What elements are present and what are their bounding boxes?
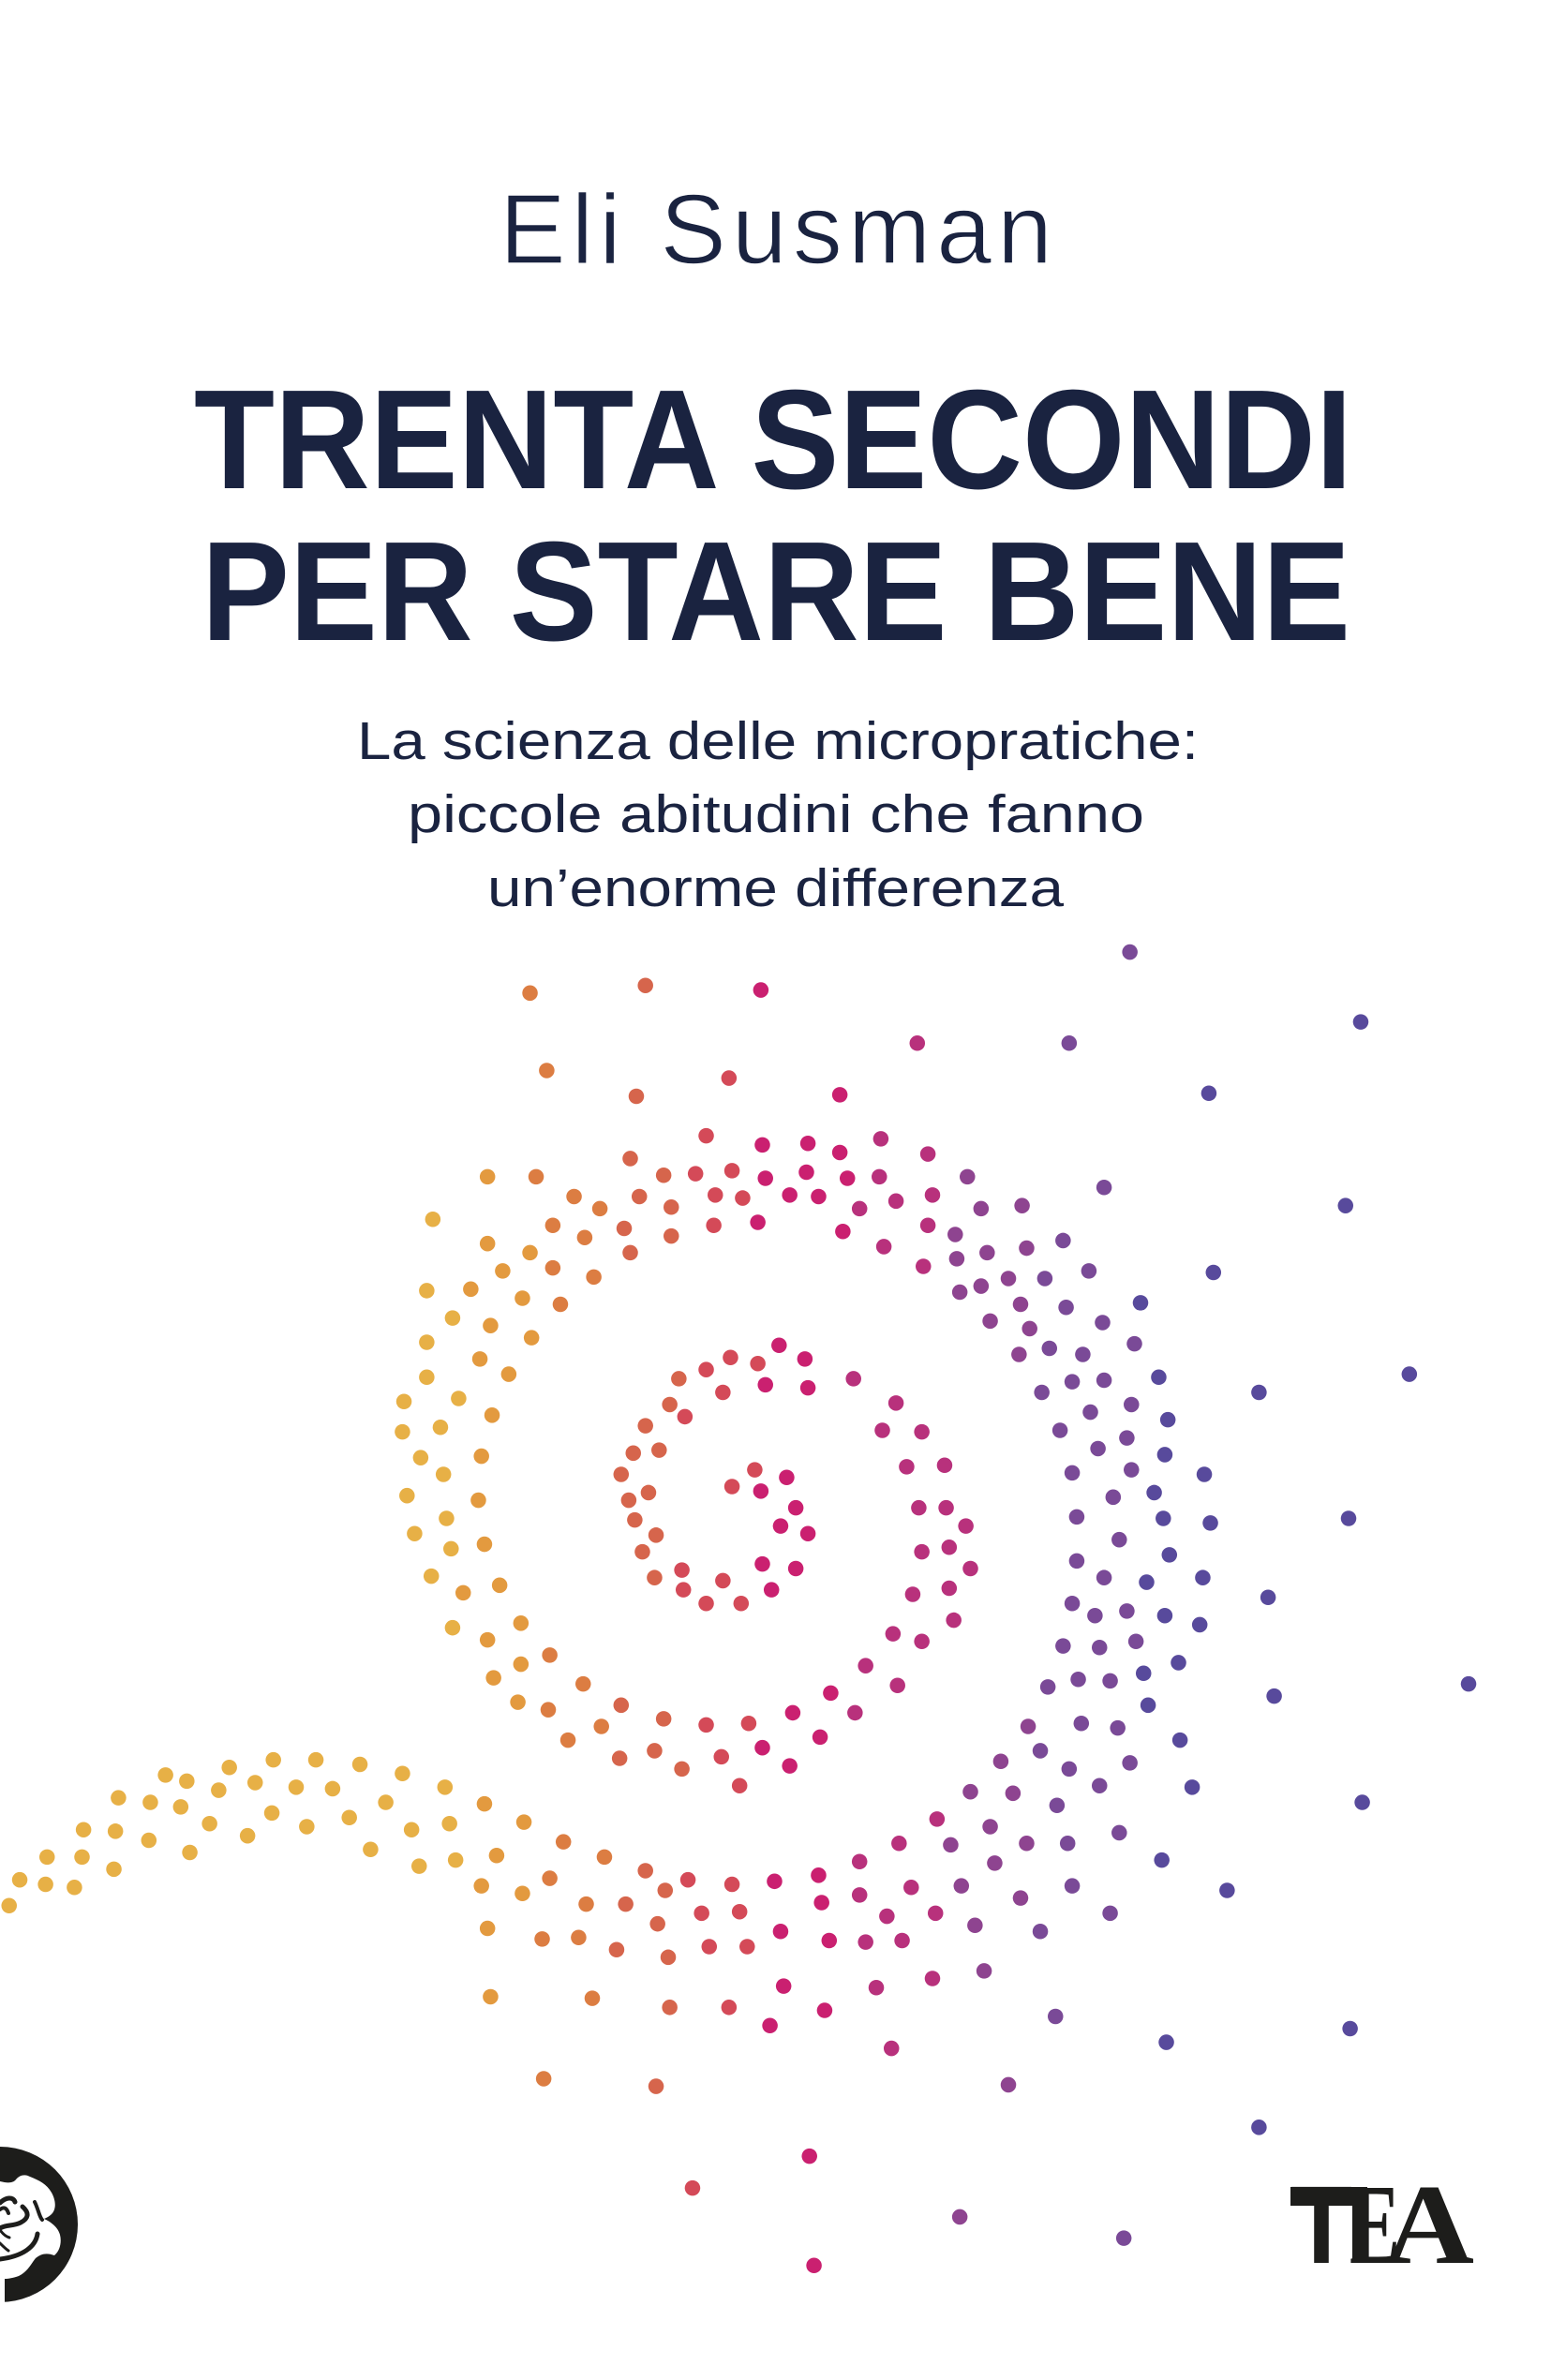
TEA publisher logo: T (1290, 2164, 1352, 2287)
title: PER STARE BENE (201, 512, 1350, 670)
subtitle (357, 711, 1199, 918)
scattered outer dots (483, 945, 1476, 2273)
title: TRENTA SECONDI (194, 360, 1352, 518)
subtitle: piccole abitudini che fanno (408, 784, 1144, 844)
trailing wave of dots (1, 1752, 1118, 2033)
inner spiral (614, 1337, 978, 1649)
title (194, 360, 1352, 670)
author name: Eli Susman (500, 174, 1052, 285)
icon: rose publisher seal (0, 2147, 78, 2303)
TEA publisher logo: E (1350, 2162, 1400, 2288)
TEA publisher logo (1290, 2162, 1474, 2288)
TEA publisher logo: A (1384, 2162, 1474, 2288)
outer spiral ring (395, 1128, 1218, 1871)
subtitle: un’enorme differenza (487, 858, 1064, 918)
subtitle: La scienza delle micropratiche: (357, 711, 1199, 771)
dotted spiral illustration (1, 945, 1476, 2273)
